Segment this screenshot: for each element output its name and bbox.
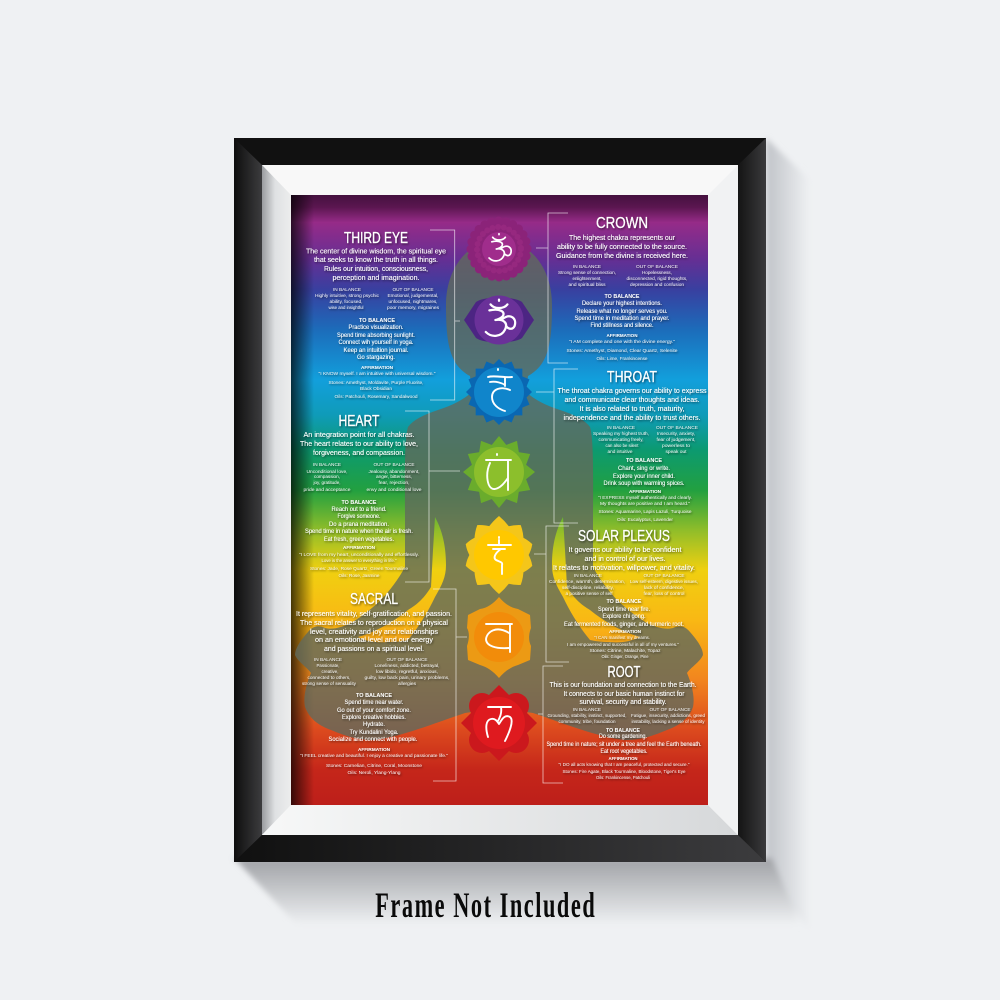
- in balance: Confidence, warmth, determination,: [549, 579, 625, 584]
- in balance: Unconditional love,: [306, 469, 348, 474]
- out of balance: [626, 264, 688, 287]
- caption: frame not included: Frame Not Included: [375, 886, 595, 925]
- affirmation: Oils: Rose, Jasmine: [338, 573, 380, 578]
- connector bracket: throat: [536, 369, 578, 523]
- description: The sacral relates to reproduction on a physical: [300, 618, 448, 627]
- out of balance: OUT OF BALANCE: [650, 707, 690, 712]
- out of balance: allergies: [398, 681, 417, 686]
- connector bracket: sacral: [433, 589, 467, 781]
- heading: THROAT: [607, 369, 657, 386]
- in balance: community, tribe, foundation: [558, 719, 616, 724]
- to balance: TO BALANCE: [359, 318, 395, 324]
- icon: root glyph: [486, 707, 512, 741]
- in balance: Strong sense of connection,: [558, 270, 616, 275]
- description: on an emotional level and our energy: [315, 635, 433, 644]
- chakra: third eye: [464, 296, 534, 344]
- chakra: root: [461, 685, 537, 761]
- affirmation: "I CAN manifest my dreams.: [594, 635, 650, 640]
- out of balance: Low self-esteem, digestive issues,: [630, 579, 698, 584]
- heading: CROWN: [596, 215, 648, 232]
- out of balance: depression and confusion: [630, 282, 685, 287]
- out of balance: fear, loss of control: [644, 591, 684, 596]
- to balance: TO BALANCE: [606, 728, 640, 734]
- affirmation: "I EXPRESS myself authentically and clearly.: [598, 495, 692, 500]
- to balance: Spend time absorbing sunlight.: [337, 332, 415, 339]
- description: It is also related to truth, maturity,: [580, 404, 684, 413]
- out of balance: poor memory, migraines: [387, 305, 440, 310]
- in balance: [593, 425, 649, 454]
- out of balance: disconnected, rigid thoughts,: [626, 276, 688, 281]
- affirmation: "I KNOW myself. I am intuitive with universal wisdom.": [318, 371, 436, 376]
- to balance: Go stargazing.: [357, 354, 395, 361]
- to balance: [564, 599, 684, 628]
- to balance: TO BALANCE: [356, 693, 392, 699]
- to balance: [328, 693, 418, 743]
- description: [550, 680, 697, 706]
- out of balance: Jealousy, abandonment,: [368, 469, 420, 474]
- affirmation: Stones: Fire Agate, Black Tourmaline, Bloodstone, Tiger's Eye: [562, 769, 686, 774]
- to balance: Find stillness and silence.: [590, 322, 654, 329]
- icon: crown glyph: [489, 234, 511, 261]
- affirmation: Stones: Citrine, Malachite, Topaz: [590, 648, 661, 653]
- to balance: Forgive someone.: [338, 513, 381, 520]
- out of balance: OUT OF BALANCE: [392, 287, 434, 292]
- panel: solar plexus: [549, 528, 698, 659]
- affirmation: Oils: Lime, Frankincense: [596, 356, 648, 361]
- description: perception and imagination.: [332, 273, 420, 282]
- description: It connects to our basic human instinct for: [564, 689, 685, 698]
- affirmation: AFFIRMATION: [358, 747, 391, 752]
- description: and passions on a spiritual level.: [324, 644, 424, 653]
- affirmation: [598, 489, 692, 522]
- icon: throat glyph: [488, 369, 512, 411]
- out of balance: [387, 287, 440, 310]
- description: level, creativity and joy and relationships: [310, 627, 438, 636]
- in balance: compassion,: [314, 474, 340, 479]
- in balance: IN BALANCE: [314, 657, 342, 662]
- meditating body silhouette: [295, 240, 703, 740]
- affirmation: [299, 545, 419, 578]
- chakra: throat: [466, 359, 532, 425]
- description: forgiveness, and compassion.: [313, 448, 405, 457]
- in balance: self-discipline, reliability,: [562, 585, 614, 590]
- to balance: [546, 728, 702, 755]
- affirmation: Stones: Aquamarine, Lapis Lazuli, Turquoise: [598, 509, 692, 514]
- description: [553, 545, 695, 572]
- out of balance: Loneliness, addicted, betrayal,: [374, 663, 440, 668]
- to balance: Spend time near fire.: [598, 606, 650, 613]
- to balance: Explore creative hobbies.: [342, 714, 406, 721]
- to balance: Practice visualization.: [348, 324, 404, 331]
- heading: HEART: [338, 413, 380, 430]
- to balance: [604, 458, 685, 487]
- to balance: Do some gardening.: [599, 733, 647, 740]
- panel: sacral: [296, 591, 452, 775]
- description: [306, 246, 446, 282]
- in balance: and intuitive: [608, 449, 633, 454]
- to balance: TO BALANCE: [342, 500, 377, 506]
- poster edge shadow: [291, 195, 314, 805]
- description: It governs our ability to be confident: [568, 545, 682, 554]
- out of balance: OUT OF BALANCE: [374, 462, 414, 467]
- to balance: Chant, sing or write.: [618, 465, 670, 472]
- description: It represents vitality, self-gratification, and passion.: [296, 609, 452, 618]
- to balance: [574, 294, 670, 329]
- description: that seeks to know the truth in all things.: [314, 255, 438, 264]
- out of balance: [656, 425, 698, 454]
- in balance: enlightenment,: [572, 276, 602, 281]
- to balance: Reach out to a friend.: [332, 506, 387, 513]
- in balance: connected to others,: [308, 675, 350, 680]
- in balance: [302, 657, 357, 686]
- in balance: IN BALANCE: [607, 425, 635, 430]
- in balance: strong sense of sensuality: [302, 681, 357, 686]
- to balance: [305, 500, 413, 543]
- panel: third eye: [306, 230, 446, 399]
- in balance: ability, focused,: [330, 299, 362, 304]
- icon: solar plexus glyph: [488, 537, 511, 574]
- out of balance: powerless to: [662, 443, 691, 448]
- out of balance: Hopelessness,: [642, 270, 672, 275]
- out of balance: OUT OF BALANCE: [386, 657, 428, 662]
- icon: heart glyph: [486, 454, 511, 490]
- out of balance: low libido, regretful, anxious,: [376, 669, 438, 674]
- description: This is our foundation and connection to the Earth.: [550, 680, 697, 689]
- to balance: Spend time in meditation and prayer.: [574, 315, 670, 322]
- in balance: Speaking my highest truth,: [593, 431, 649, 436]
- out of balance: fear, rejection,: [378, 480, 410, 485]
- description: and in control of our lives.: [584, 554, 666, 563]
- chakra: crown: [471, 221, 527, 277]
- affirmation: Black Obsidian: [360, 386, 393, 391]
- icon: third eye glyph: [486, 300, 515, 336]
- affirmation: AFFIRMATION: [609, 629, 642, 634]
- out of balance: [630, 573, 698, 596]
- affirmation: "I FEEL creative and beautiful. I enjoy a creative and passionate life.": [300, 753, 448, 758]
- in balance: joy, gratitude,: [312, 480, 340, 485]
- out of balance: speak out: [666, 449, 687, 454]
- out of balance: [364, 657, 450, 686]
- affirmation: Oils: Ginger, Orange, Pine: [602, 654, 649, 659]
- to balance: Eat root vegetables.: [600, 748, 648, 755]
- frame drop shadow: [234, 138, 812, 935]
- to balance: TO BALANCE: [606, 599, 642, 605]
- in balance: Grounding, stability, instinct, supported,: [548, 713, 626, 718]
- in balance: IN BALANCE: [313, 462, 341, 467]
- to balance: Explore your inner child.: [613, 473, 675, 480]
- affirmation: "I AM complete and one with the divine energy.": [569, 339, 675, 344]
- description: The throat chakra governs our ability to express: [558, 386, 707, 395]
- affirmation: AFFIRMATION: [361, 365, 394, 370]
- out of balance: OUT OF BALANCE: [644, 573, 684, 578]
- to balance: Socialize and connect with people.: [328, 736, 418, 743]
- to balance: Spend time in nature when the air is fresh.: [305, 528, 413, 535]
- out of balance: OUT OF BALANCE: [636, 264, 678, 269]
- to balance: Do a prana meditation.: [329, 521, 389, 528]
- panel: root: [546, 664, 705, 780]
- to balance: Connect wih yourself in yoga.: [338, 339, 414, 346]
- description: [556, 233, 688, 260]
- heading: ROOT: [608, 664, 641, 681]
- in balance: [315, 287, 380, 310]
- in balance: Passionate,: [316, 663, 340, 668]
- affirmation: [318, 365, 436, 399]
- connector bracket: root: [538, 666, 563, 783]
- heading: THIRD EYE: [344, 230, 408, 247]
- to balance: Keep an intuition journal.: [344, 347, 409, 354]
- icon: sacral glyph: [486, 624, 512, 652]
- to balance: Release what no longer serves you.: [576, 308, 668, 315]
- to balance: Hydrate.: [363, 721, 385, 728]
- chakra: heart: [461, 434, 537, 510]
- in balance: and spiritual bliss: [568, 282, 606, 287]
- chakra: solar plexus: [460, 514, 538, 596]
- affirmation: [567, 629, 679, 659]
- description: and communicate clear thoughts and ideas.: [564, 395, 700, 404]
- out of balance: anger, bitterness,: [376, 474, 412, 479]
- heading: SOLAR PLEXUS: [578, 528, 670, 545]
- out of balance: [631, 707, 705, 724]
- affirmation: [566, 333, 678, 361]
- affirmation: Oils: Frankincense, Patchouli: [596, 775, 650, 780]
- to balance: TO BALANCE: [604, 294, 640, 300]
- description: ability to be fully connected to the source.: [557, 242, 687, 251]
- out of balance: Emotional, judgemental,: [388, 293, 438, 298]
- description: survival, security and stability.: [580, 697, 666, 706]
- description: It relates to motivation, willpower, and vitality.: [553, 563, 695, 572]
- in balance: can also be silent: [606, 443, 639, 448]
- connector bracket: heart: [405, 411, 460, 582]
- out of balance: lack of confidence,: [644, 585, 684, 590]
- affirmation: I am empowered and successful in all of my ventures.": [567, 642, 679, 647]
- affirmation: "I DO all acts knowing that I am peaceful, protected and secure.": [558, 762, 690, 767]
- to balance: Spend time near water.: [344, 699, 404, 706]
- in balance: [549, 573, 625, 596]
- in balance: a positive sense of self: [566, 591, 613, 596]
- chakra: sacral: [467, 597, 531, 678]
- to balance: Declare your highest intentions.: [582, 300, 662, 307]
- affirmation: Oils: Patchouli, Rosemary, Sandalwood: [334, 394, 418, 399]
- affirmation: AFFIRMATION: [343, 545, 376, 550]
- affirmation: Oils: Neroli, Ylang-Ylang: [348, 770, 401, 775]
- affirmation: Stones: Amethyst, Moldavite, Purple Fluorite,: [328, 380, 424, 385]
- affirmation: Stones: Jade, Rose Quartz, Green Tourmaline: [310, 566, 409, 571]
- description: The heart relates to our ability to love,: [300, 439, 418, 448]
- out of balance: unfocused, nightmares,: [388, 299, 438, 304]
- to balance: Spend time in nature; sit under a tree and feel the Earth beneath.: [546, 741, 702, 748]
- description: An integration point for all chakras.: [304, 430, 415, 439]
- to balance: TO BALANCE: [626, 458, 662, 464]
- rainbow gradient background: [291, 195, 708, 805]
- to balance: Explore chi gong.: [602, 613, 646, 620]
- connector bracket: solar plexus: [534, 526, 569, 662]
- in balance: [558, 264, 616, 287]
- in balance: communicating freely,: [598, 437, 644, 442]
- description: The center of divine wisdom, the spiritual eye: [306, 246, 446, 256]
- to balance: Drink soup with warming spices.: [604, 480, 685, 487]
- affirmation: AFFIRMATION: [606, 333, 638, 338]
- affirmation: AFFIRMATION: [608, 756, 638, 761]
- description: independence and the ability to trust others.: [564, 413, 701, 422]
- to balance: Try Kundalini Yoga.: [350, 729, 399, 736]
- out of balance: envy and conditional love: [366, 487, 422, 492]
- in balance: IN BALANCE: [573, 707, 601, 712]
- connector bracket: crown: [536, 213, 568, 363]
- affirmation: "I LOVE from my heart, unconditionally and effortlessly.: [299, 552, 419, 557]
- affirmation: Oils: Eucalyptus, Lavender: [617, 517, 674, 522]
- in balance: IN BALANCE: [333, 287, 361, 292]
- panel: throat: [558, 369, 707, 522]
- white mat: [262, 165, 738, 835]
- in balance: [548, 707, 626, 724]
- description: The highest chakra represents our: [569, 233, 676, 242]
- black picture frame: [234, 138, 766, 862]
- description: [296, 609, 452, 653]
- out of balance: fear of judgement,: [656, 437, 696, 442]
- out of balance: guilty, low back pain, urinary problems,: [364, 675, 450, 680]
- in balance: [304, 462, 351, 492]
- panel: crown: [556, 215, 688, 361]
- poster: [291, 195, 708, 805]
- affirmation: [558, 756, 690, 780]
- to balance: Go out of your comfort zone.: [337, 707, 411, 714]
- description: [558, 386, 707, 422]
- in balance: pride and acceptance: [304, 487, 351, 492]
- connector bracket: third eye: [430, 230, 460, 400]
- out of balance: [366, 462, 422, 492]
- affirmation: AFFIRMATION: [629, 489, 662, 494]
- to balance: Eat fresh, green vegetables.: [324, 536, 394, 543]
- in balance: creative,: [322, 669, 338, 674]
- affirmation: Stones: Carnelian, Citrine, Coral, Moonstone: [326, 763, 423, 768]
- panel: heart: [299, 413, 422, 578]
- in balance: wise and insightful: [328, 305, 364, 310]
- in balance: IN BALANCE: [574, 573, 602, 578]
- description: [300, 430, 418, 457]
- description: Guidance from the divine is received here.: [556, 251, 688, 260]
- out of balance: instability, lacking a sense of identity: [632, 719, 705, 724]
- description: Rules our intuition, consciousness,: [324, 264, 428, 273]
- to balance: Eat fermented foods, ginger, and turmeric root.: [564, 621, 684, 628]
- in balance: Highly intuitive, strong psychic: [315, 293, 380, 298]
- out of balance: Insecurity, anxiety,: [657, 431, 695, 436]
- heading: SACRAL: [350, 591, 398, 608]
- affirmation: [300, 747, 448, 775]
- in balance: IN BALANCE: [573, 264, 601, 269]
- affirmation: Love is the answer to everything in life.": [322, 558, 397, 563]
- out of balance: Fatigue, insecurity, addictions, greed: [631, 713, 705, 718]
- affirmation: My thoughts are positive and I am heard.": [600, 501, 690, 506]
- affirmation: Stones: Amethyst, Diamond, Clear Quartz, Selenite: [566, 348, 678, 353]
- to balance: [337, 318, 415, 361]
- out of balance: OUT OF BALANCE: [656, 425, 698, 430]
